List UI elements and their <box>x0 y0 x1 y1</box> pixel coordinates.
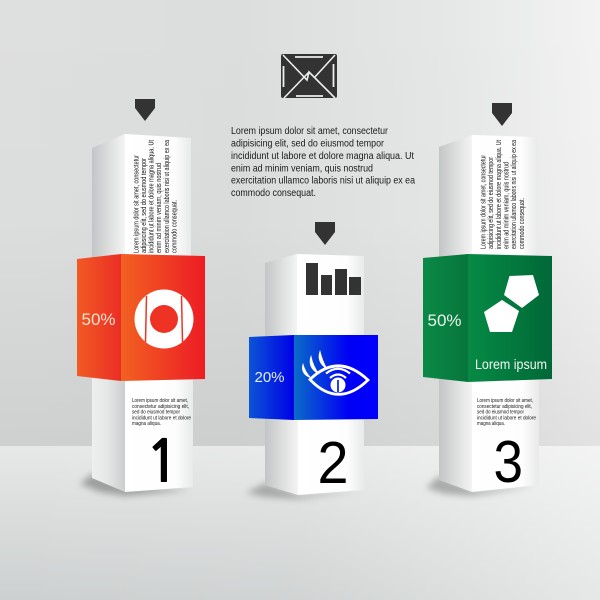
column 2 <box>246 254 378 499</box>
column 3 rotated text: incididunt ut labore et dolore magna aliqua. Ut <box>496 140 503 249</box>
text block: intro paragraph: adipisicing elit, sed do eiusmod tempor <box>231 138 385 150</box>
column 3 small text: magna aliqua. <box>477 421 505 427</box>
arrow: column 3 <box>492 103 512 126</box>
icon: envelope <box>281 54 337 98</box>
column 3 lower pillar <box>439 375 539 492</box>
column 3 rotated text: Lorem ipsum dolor sit amet, consectetur <box>480 154 488 249</box>
column 2 upper pillar <box>265 254 364 340</box>
column 3 small text: Lorem ipsum dolor sit amet, <box>477 398 533 404</box>
text block: intro paragraph <box>231 126 415 199</box>
column 1 percentage: 50% <box>81 310 116 329</box>
column 1 small text: consectetur adipisicing elit, <box>132 404 189 410</box>
column 1 rotated text: enim ad minim veniam, quis nostrud <box>156 163 163 253</box>
column 1 red box <box>77 254 205 381</box>
column 3 number: 3 <box>494 429 523 495</box>
column 3 rotated text: adipisicing elit, sed do eiusmod tempor <box>488 156 495 249</box>
column 2 blue box <box>249 335 378 420</box>
column 3 label: Lorem ipsum <box>475 357 547 372</box>
text block: intro paragraph: incididunt ut labore et dolore magna aliqua. Ut <box>231 151 414 162</box>
column 3 small text: consectetur adipisicing elit, <box>477 404 532 410</box>
column 3 small text: incididunt ut labore et dolore <box>477 415 536 421</box>
column 2 floor shadow <box>246 483 360 499</box>
column 1 <box>77 134 205 496</box>
column 1 floor shadow <box>80 474 190 496</box>
column 3 upper pillar <box>439 135 538 260</box>
column 2 number: 2 <box>318 430 348 496</box>
column 1 rotated text: adipisicing elit, sed do eiusmod tempor <box>141 157 148 253</box>
column 2 lower pillar <box>265 415 364 495</box>
column 3 small text: sed do eiusmod tempor <box>477 410 524 416</box>
column 3 <box>423 135 552 496</box>
column 1 rotated text: exercitation ullamco laboris nisi ut aliquip ex ea <box>164 140 171 253</box>
column 3 rotated text: commodo consequat. <box>519 198 526 249</box>
text block: intro paragraph: enim ad minim veniam, quis nostrud <box>231 163 373 174</box>
arrow: column 2 <box>315 222 335 245</box>
column 2 percentage: 20% <box>254 369 285 386</box>
icon: eye <box>302 351 368 394</box>
column 3 small text <box>477 398 536 427</box>
column 3 rotated text: enim ad minim veniam, quis nostrud <box>504 162 510 249</box>
column 1 upper pillar <box>92 134 191 260</box>
column 3 rotated text: exercitation ullamco laboris nisi ut aliquip ex ea <box>511 140 518 249</box>
column 1 small text: Lorem ipsum dolor sit amet, <box>132 398 188 404</box>
column 1 rotated text: incididunt ut labore et dolore magna aliqua. Ut <box>148 140 156 253</box>
column 1 small text: incididunt ut labore et dolore <box>132 415 191 421</box>
column 1 rotated text: commodo consequat. <box>172 200 178 253</box>
background floor <box>0 446 600 600</box>
column 1 small text: sed do eiusmod tempor <box>132 410 180 416</box>
text block: intro paragraph: exercitation ullamco laboris nisi ut aliquip ex ea <box>231 176 415 187</box>
arrow: column 1 <box>135 99 155 121</box>
column 1 rotated text <box>134 140 178 253</box>
text block: intro paragraph: Lorem ipsum dolor sit amet, consectetur <box>231 126 389 137</box>
column 3 rotated text <box>480 140 526 249</box>
column 3 percentage: 50% <box>427 311 462 330</box>
icon: circle with ring <box>134 290 194 348</box>
icon: bar chart <box>306 263 361 295</box>
text block: intro paragraph: commodo consequat. <box>231 188 316 199</box>
column 1 lower pillar <box>92 375 193 492</box>
column 1 rotated text: Lorem ipsum dolor sit amet, consectetur <box>134 154 140 253</box>
column 3 floor shadow <box>426 476 535 496</box>
column 1 number: 1 <box>145 433 180 491</box>
column 1 small text: magna aliqua. <box>132 421 161 427</box>
column 1 small text <box>132 398 191 427</box>
column 3 green box <box>423 254 552 382</box>
icon: pentagons <box>484 275 539 332</box>
background wall <box>0 0 600 446</box>
